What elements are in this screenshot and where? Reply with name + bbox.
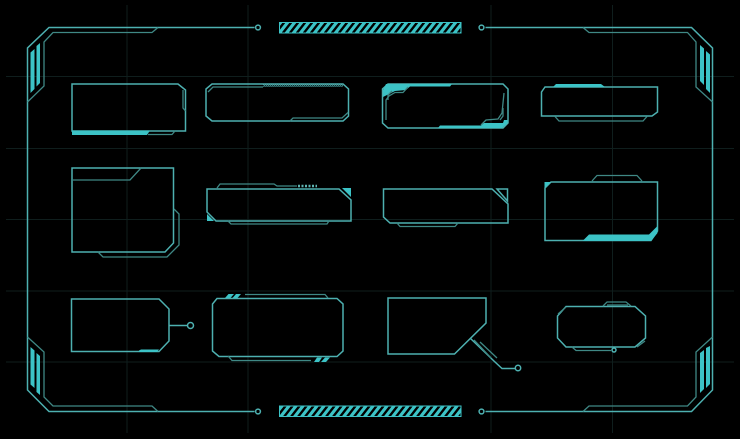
top hatched bar <box>279 22 461 34</box>
panel: row 1 frame 4 <box>542 84 658 121</box>
panel: row 3 frame 2 <box>212 294 343 362</box>
bottom hatched bar <box>279 406 461 417</box>
panel: row 1 frame 1 <box>72 84 186 135</box>
frame: side rails <box>28 148 712 337</box>
panel: row 2 frame 4 <box>544 176 658 241</box>
panel: row 3 frame 1 <box>72 299 194 352</box>
frame: bottom left corner <box>28 337 260 414</box>
panel: row 3 frame 4 <box>558 302 646 352</box>
panel: row 1 frame 3 <box>382 84 508 128</box>
panel: row 2 frame 2 <box>207 184 351 224</box>
panel: row 2 frame 3 <box>384 189 508 226</box>
frame: top right corner <box>479 25 712 148</box>
panel: row 2 frame 1 <box>72 168 179 257</box>
frame: bottom right corner <box>479 337 712 414</box>
panel: row 1 frame 2 <box>206 84 348 121</box>
frame: top left corner <box>28 25 260 148</box>
panel: row 3 frame 3 <box>388 298 521 371</box>
